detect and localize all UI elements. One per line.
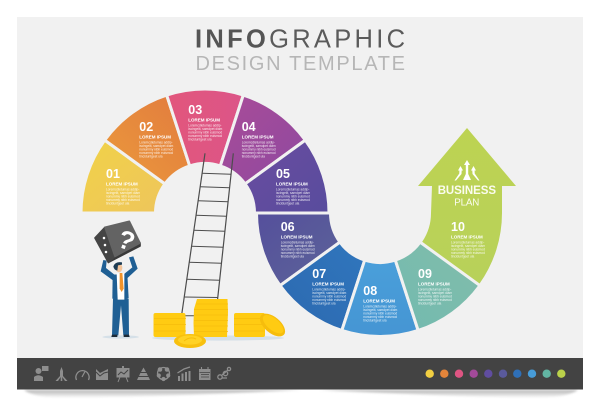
text 04: LOREM IPSUM — [242, 134, 274, 139]
text 06: nonummy nibh euismod — [281, 248, 315, 252]
icon: growth bars — [178, 367, 190, 381]
text 09: nonummy nibh euismod — [418, 298, 452, 302]
icon: presenter — [34, 366, 48, 381]
dot 6 — [499, 370, 507, 378]
dot 1 — [426, 370, 434, 378]
head — [116, 264, 122, 272]
text 10 — [451, 220, 485, 258]
text 10: iscingelit, samdpet diam — [451, 244, 485, 248]
text 08: nonummy nibh euismod — [363, 315, 397, 319]
icon: area chart — [96, 369, 108, 380]
text 03: Loremcdietumas addip- — [188, 124, 222, 128]
dot 2 — [440, 370, 448, 378]
icon: route — [218, 367, 231, 379]
icon: three arrows — [454, 160, 480, 180]
title line 1: INFOGRAPHIC — [195, 25, 405, 53]
segment 01 — [81, 140, 165, 213]
dot 7 — [513, 370, 522, 378]
text 03: 03 — [188, 103, 202, 117]
text 02: nonummy nibh euismod — [139, 151, 173, 155]
text 05: nonummy nibh euismod — [276, 198, 310, 202]
bar shadow left — [24, 390, 300, 398]
text 08 — [363, 284, 398, 322]
icon: gauge — [76, 371, 89, 380]
text 03: nonummy nibh euismod — [188, 134, 222, 138]
text 02: LOREM IPSUM — [139, 134, 171, 139]
text 05: nonummy nibh euismod — [276, 194, 310, 198]
dot 5 — [484, 370, 492, 378]
segment 05 — [245, 140, 329, 213]
legs — [112, 299, 129, 335]
text 02: iscingelit, samdpet diam — [139, 144, 174, 148]
title line 2: DESIGN TEMPLATE — [196, 53, 405, 75]
hair — [113, 262, 122, 271]
flat coin — [174, 334, 206, 348]
dot 4 — [470, 370, 478, 378]
grey panel — [17, 17, 583, 358]
text 07: nonummy nibh euismod — [312, 298, 346, 302]
text 04: iscingelit, samdpet diam — [242, 144, 276, 148]
dot 3 — [455, 370, 463, 378]
text 05: LOREM IPSUM — [276, 181, 308, 186]
dot 10 — [557, 370, 566, 378]
text 06: nonummy nibh euismod — [281, 251, 315, 255]
text 09: Loremcdietumas addip- — [418, 288, 451, 292]
text 05: 05 — [276, 167, 290, 181]
man shadow — [102, 335, 139, 339]
text 02: tinciduntgeet ula — [139, 154, 163, 158]
text 04: nonummy nibh euismod — [242, 151, 276, 155]
text 04: nonummy nibh euismod — [242, 148, 276, 152]
text 07: nonummy nibh euismod — [312, 294, 346, 298]
text 09: tinciduntgeet ula — [418, 301, 441, 305]
text 06 — [281, 220, 315, 258]
text 01: nonummy nibh euismod — [106, 198, 140, 202]
text 09: LOREM IPSUM — [418, 281, 450, 286]
text 01 — [106, 167, 140, 205]
text 07: iscingelit, samdpet diam — [312, 291, 347, 295]
dot 8 — [528, 370, 536, 378]
text 02: nonummy nibh euismod — [139, 148, 173, 152]
text 01: 01 — [106, 167, 120, 181]
dice left face — [95, 227, 115, 262]
text 10: Loremcdietumas addip- — [451, 241, 484, 245]
icon: presentation board — [116, 366, 130, 382]
tie — [120, 273, 124, 292]
icon: circular network — [157, 367, 170, 381]
text 08: LOREM IPSUM — [363, 298, 395, 303]
business label: BUSINESS — [438, 185, 496, 197]
segment 10 with arrow — [418, 128, 516, 284]
text 02: Loremcdietumas addip- — [139, 141, 173, 145]
text 05: tinciduntgeet ula — [276, 201, 299, 205]
plan label: PLAN — [454, 197, 479, 208]
text 06: Loremcdietumas addip- — [281, 241, 314, 245]
text 05 — [276, 167, 310, 205]
text 09: iscingelit, samdpet diam — [418, 291, 452, 295]
jacket — [112, 274, 129, 300]
text 08: iscingelit, samdpet diam — [363, 308, 398, 312]
text 08: nonummy nibh euismod — [363, 312, 397, 316]
bottom bar — [17, 358, 583, 390]
shirt — [117, 273, 124, 300]
text 05: Loremcdietumas addip- — [276, 188, 309, 192]
text 06: iscingelit, samdpet diam — [281, 244, 315, 248]
text 07: 07 — [312, 267, 326, 281]
text 06: 06 — [281, 220, 295, 234]
text 01: tinciduntgeet ula — [106, 201, 129, 205]
text 07: LOREM IPSUM — [312, 281, 344, 286]
icon: calendar — [199, 367, 210, 380]
segment 04 — [220, 95, 305, 184]
text 03: iscingelit, samdpet diam — [188, 127, 223, 131]
text 04 — [242, 120, 276, 158]
text 03: LOREM IPSUM — [188, 117, 220, 122]
coin stack right — [234, 313, 265, 337]
arms — [101, 256, 138, 281]
icon: road arrows — [56, 367, 68, 381]
question mark: ? — [114, 223, 139, 257]
icon: pyramid — [137, 368, 150, 380]
text 06: LOREM IPSUM — [281, 234, 313, 239]
tilted coin — [256, 309, 289, 341]
dot 9 — [542, 370, 551, 378]
text 01: LOREM IPSUM — [106, 181, 138, 186]
bar shadow right — [320, 390, 578, 398]
segment 07 — [280, 242, 365, 330]
dice — [95, 221, 140, 262]
text 04: 04 — [242, 120, 256, 134]
businessman lifting dice — [101, 256, 139, 339]
segment 08 — [342, 260, 418, 337]
text 07: Loremcdietumas addip- — [312, 288, 346, 292]
text 05: iscingelit, samdpet diam — [276, 191, 310, 195]
ground shadow — [152, 335, 284, 341]
coin stack left — [154, 313, 186, 337]
text 10: tinciduntgeet ula — [451, 254, 474, 258]
text 10: 10 — [451, 220, 465, 234]
dice bottom face — [108, 243, 140, 262]
text 03: tinciduntgeet ula — [188, 137, 212, 141]
colour dots legend — [426, 370, 566, 378]
segment 06 — [256, 213, 340, 286]
title — [195, 25, 405, 75]
text 01: nonummy nibh euismod — [106, 194, 140, 198]
text 07 — [312, 267, 347, 305]
arrow heading — [438, 185, 496, 208]
text 09 — [418, 267, 452, 305]
text 09: nonummy nibh euismod — [418, 294, 452, 298]
ladder — [181, 153, 233, 318]
dice dots — [103, 237, 107, 253]
coin stack middle — [194, 299, 228, 337]
segment 02 — [105, 95, 190, 184]
text 07: tinciduntgeet ula — [312, 301, 336, 305]
segment 09 — [395, 242, 480, 330]
text 02: 02 — [139, 120, 153, 134]
text 10: nonummy nibh euismod — [451, 248, 485, 252]
text 03 — [188, 103, 223, 141]
text 09: 09 — [418, 267, 432, 281]
text 06: tinciduntgeet ula — [281, 254, 304, 258]
text 03: nonummy nibh euismod — [188, 130, 222, 134]
text 08: Loremcdietumas addip- — [363, 305, 397, 309]
dice main face — [105, 221, 140, 256]
text 02 — [139, 120, 174, 158]
segment 03 — [167, 89, 243, 166]
text 01: Loremcdietumas addip- — [106, 188, 139, 192]
text 10: LOREM IPSUM — [451, 234, 483, 239]
text 08: tinciduntgeet ula — [363, 318, 387, 322]
text 10: nonummy nibh euismod — [451, 251, 485, 255]
icon row — [34, 366, 231, 382]
text 04: Loremcdietumas addip- — [242, 141, 275, 145]
text 04: tinciduntgeet ula — [242, 154, 265, 158]
shoes — [111, 335, 130, 337]
text 08: 08 — [363, 284, 377, 298]
text 01: iscingelit, samdpet diam — [106, 191, 140, 195]
